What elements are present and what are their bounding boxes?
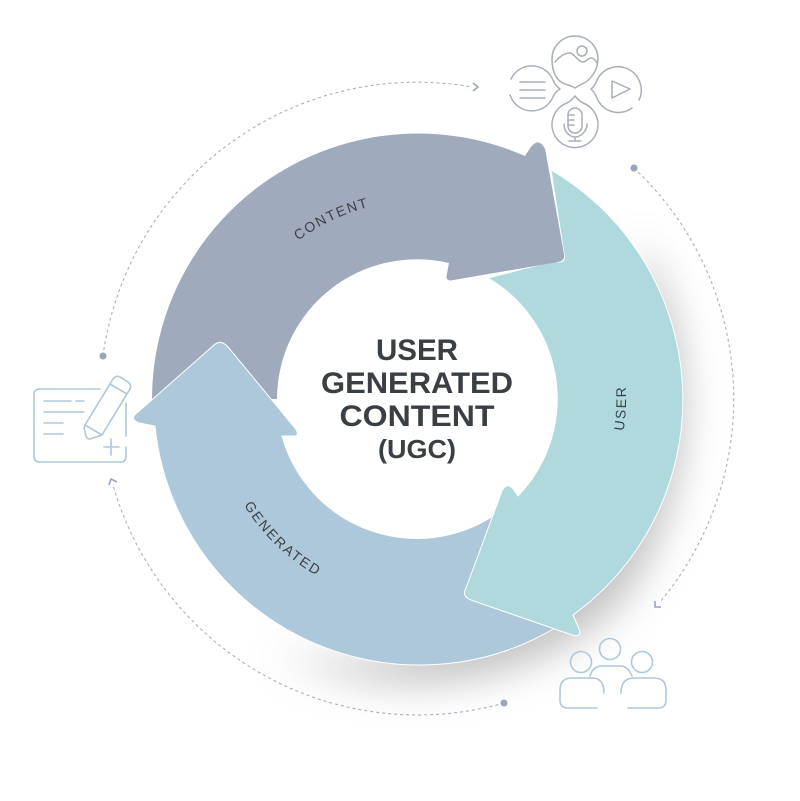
title: (UGC)	[378, 434, 456, 464]
text bubble	[510, 66, 560, 111]
microphone bubble	[552, 96, 598, 148]
label: USER: USER	[614, 388, 626, 430]
icon: content creation note with pencil	[34, 376, 131, 462]
arrow: generated segment	[133, 342, 555, 665]
title: CONTENT	[340, 400, 494, 433]
dashed arc: right	[630, 164, 734, 607]
icon: media speech bubbles	[510, 36, 641, 148]
dashed arc: top left	[100, 82, 478, 360]
arrow: user segment	[464, 170, 683, 636]
image bubble	[552, 36, 598, 88]
title	[321, 334, 513, 464]
label: CONTENT: CONTENT	[294, 198, 366, 239]
title: GENERATED	[321, 367, 513, 400]
label: GENERATED: GENERATED	[246, 502, 320, 574]
dashed arc: bottom left	[109, 479, 508, 715]
title: USER	[376, 334, 458, 367]
arrow: content segment	[152, 134, 564, 400]
play bubble	[591, 67, 641, 112]
ring shadow	[270, 240, 684, 683]
arrow: content head overlay	[447, 142, 564, 280]
icon: group of people	[560, 638, 666, 708]
